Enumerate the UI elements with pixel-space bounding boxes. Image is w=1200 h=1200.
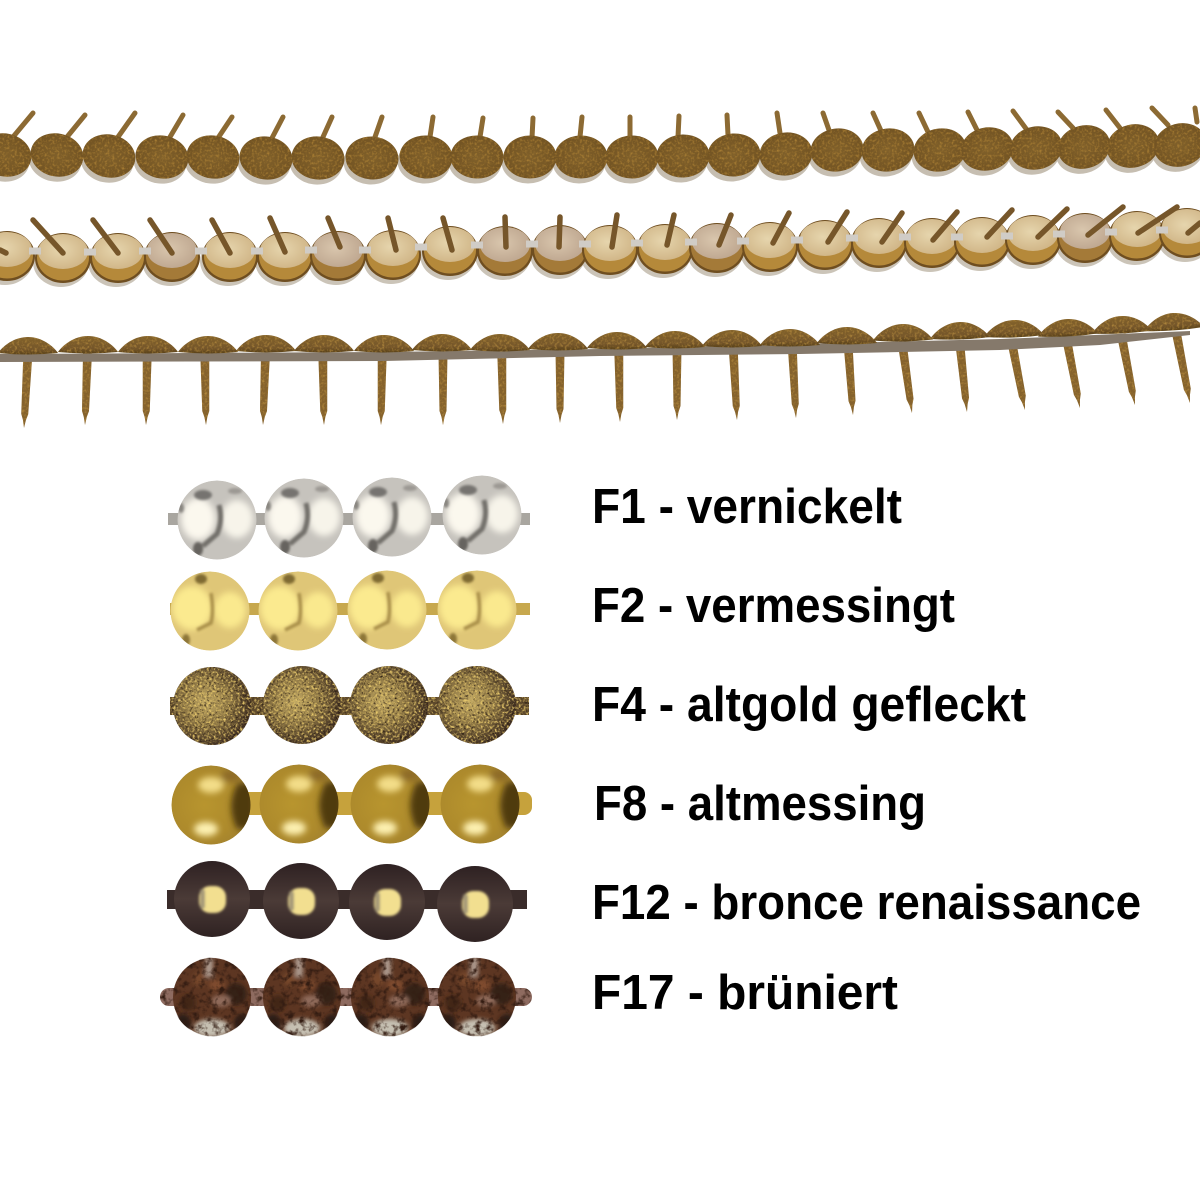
swatch F4 altgold gefleckt — [170, 666, 529, 745]
strip 3 pins — [20, 331, 1194, 428]
swatch F8 altmessing — [172, 764, 532, 844]
label F17: F17 - brüniert — [592, 966, 898, 1020]
strip 2 clear band joints — [29, 226, 1168, 256]
label F4: F4 - altgold gefleckt — [592, 678, 1026, 732]
swatch F17 bruenier — [160, 957, 532, 1037]
strip 1 heads — [0, 117, 1200, 183]
strip 2 pins — [0, 207, 1200, 253]
swatch F2 vermessingt — [170, 570, 530, 650]
label F8: F8 - altmessing — [594, 777, 926, 831]
swatch F12 bronce renaissance — [167, 861, 527, 942]
strip 1 pins — [13, 108, 1197, 138]
label F1: F1 - vernickelt — [592, 480, 902, 534]
strip 3 metal band — [0, 331, 1190, 362]
nail strip: underside view with clear band — [0, 207, 1200, 283]
nail strip: side view with metal band — [0, 311, 1200, 428]
label F12: F12 - bronce renaissance — [592, 876, 1141, 930]
label F2: F2 - vermessingt — [592, 579, 955, 633]
swatch F1 vernickelt — [168, 476, 530, 560]
nail strip: top view of domed heads — [0, 108, 1200, 183]
strip 2 heads — [0, 208, 1200, 283]
strip 3 dome heads — [0, 311, 1200, 354]
